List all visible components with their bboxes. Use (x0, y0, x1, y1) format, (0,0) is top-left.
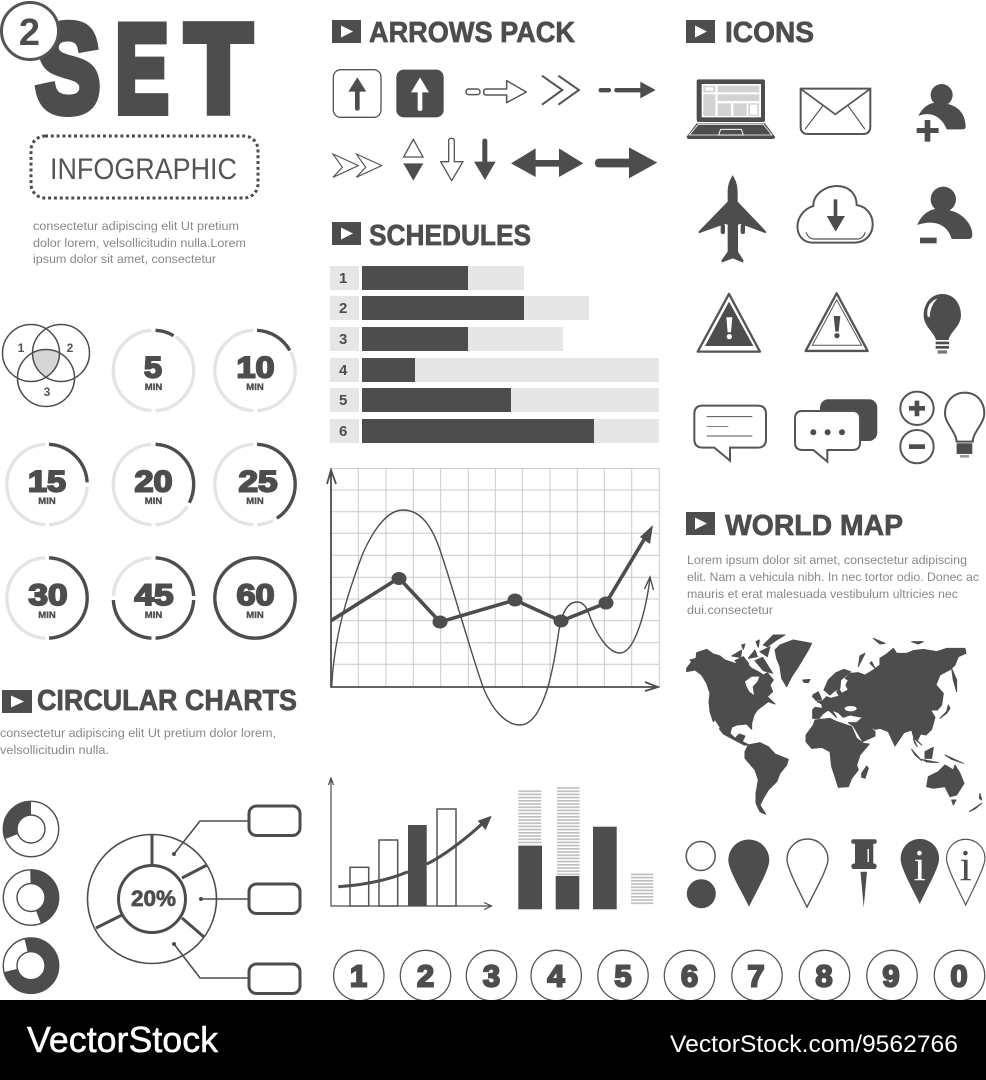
icon: filled dot (687, 879, 716, 908)
stacked bars with hatch (518, 787, 653, 909)
timer: 45 min (113, 558, 194, 638)
icon: light bulb filled (924, 294, 961, 354)
icon: filled pin (728, 839, 769, 907)
icon: user add (917, 84, 966, 142)
timer: 60 min: 60 (236, 579, 274, 612)
donut chart 2 (3, 870, 59, 925)
timer: 20 min: MIN (145, 496, 162, 507)
subtitle: infographic in dotted frame (31, 136, 258, 198)
text block: circular charts (0, 726, 276, 757)
badge: number 2 (2, 2, 58, 60)
timer: 60 min (215, 558, 295, 638)
icon: info pin outline: i (960, 841, 972, 890)
icons grid (687, 79, 984, 463)
timer: 15 min (7, 444, 87, 525)
bar chart with trend arrow (328, 778, 492, 910)
text block: intro (33, 219, 246, 266)
bar schedule chart (330, 266, 659, 443)
title: SET: E (116, 0, 168, 138)
arrows pack icons (333, 70, 657, 181)
subtitle: infographic in dotted frame: INFOGRAPHIC (50, 153, 237, 186)
bar schedule chart: 1 (339, 270, 347, 287)
timer: 15 min: MIN (38, 496, 56, 507)
timer: 20 min: 20 (134, 466, 172, 498)
heading: icons: ICONS (725, 17, 814, 49)
icon: plus and minus with bulb (900, 392, 984, 463)
line chart (327, 468, 660, 725)
bar schedule chart: 5 (339, 392, 347, 409)
timer: 25 min: MIN (246, 496, 264, 507)
icon: info pin filled (901, 839, 939, 904)
timer: 5 min: MIN (145, 382, 162, 393)
text block: intro: consectetur adipiscing elit Ut pretium (33, 219, 239, 233)
pie diagram with callouts (88, 806, 300, 994)
footer band (0, 1000, 986, 1080)
icon: envelope (801, 89, 870, 134)
number circles: 6 (681, 958, 698, 994)
timer: 5 min: 5 (144, 352, 162, 384)
footer band: VectorStock (27, 1019, 219, 1060)
timer: 25 min (215, 444, 295, 525)
timer: 30 min: 30 (28, 579, 68, 612)
bar schedule chart: 6 (339, 423, 347, 440)
title: SET: S (36, 0, 100, 138)
bar schedule chart: 3 (339, 331, 347, 348)
icon: info pin filled: i (914, 841, 926, 890)
icon: cloud download (797, 186, 873, 243)
number circles: 0 (950, 958, 968, 994)
heading: schedules: SCHEDULES (369, 220, 531, 252)
icon: warning filled (698, 294, 760, 352)
badge: number 2: 2 (19, 12, 40, 54)
number circles: 1 (350, 958, 367, 994)
icon: info pin outline (946, 839, 985, 905)
icon: warning outline (806, 293, 868, 351)
text block: intro: ipsum dolor sit amet, consectetur (33, 252, 216, 266)
text block: world map: dui.consectetur (687, 603, 773, 617)
number circles: 7 (747, 958, 765, 994)
timer: 60 min: MIN (246, 610, 264, 621)
timer: 45 min: 45 (134, 579, 174, 612)
timer: 10 min: MIN (246, 382, 264, 393)
timer: 5 min (113, 330, 194, 411)
text block: world map: mauris et erat malesuada vestibulum ultricies nec (687, 587, 958, 601)
bar schedule chart: 2 (339, 300, 347, 317)
number circles: 5 (614, 958, 632, 994)
timer: 45 min: MIN (145, 610, 162, 621)
number circles: 3 (483, 958, 500, 994)
text block: circular charts: velsollicitudin nulla. (0, 743, 109, 757)
venn diagram: 1 (18, 341, 25, 355)
timer: 20 min (113, 444, 194, 525)
timer: 10 min: 10 (236, 352, 274, 384)
number circles: 9 (882, 958, 900, 994)
number circles: 8 (815, 958, 833, 994)
title: SET: T (186, 0, 252, 138)
icon: speech bubble lines (694, 406, 766, 461)
footer band: VectorStock.com/9562766 (670, 1031, 958, 1058)
venn diagram: 3 (44, 385, 51, 399)
text block: circular charts: consectetur adipiscing elit Ut pretium dolor lorem, (0, 726, 276, 740)
heading: arrows pack: ARROWS PACK (369, 17, 575, 49)
icon: chat bubbles (795, 399, 877, 462)
world map (687, 635, 982, 814)
number circles: 4 (547, 958, 565, 994)
icon: push pin (851, 839, 877, 908)
text block: world map (687, 553, 979, 617)
timer: 30 min: MIN (38, 610, 56, 621)
icon: airplane (699, 175, 766, 263)
text block: world map: Lorem ipsum dolor sit amet, consectetur adipiscing (687, 553, 967, 567)
text block: intro: dolor lorem, velsollicitudin nulla.Lorem (33, 236, 246, 250)
number circles: 2 (417, 958, 434, 994)
venn diagram: 2 (67, 341, 74, 355)
venn diagram (2, 324, 90, 406)
donut chart 3 (3, 938, 59, 993)
bar schedule chart: 4 (339, 362, 348, 379)
donut chart 1 (3, 801, 59, 857)
timer: 25 min: 25 (238, 466, 278, 498)
timer: 30 min (7, 558, 87, 638)
icon: empty dot (686, 842, 715, 870)
heading: circular charts: CIRCULAR CHARTS (37, 685, 297, 717)
heading: world map: WORLD MAP (725, 510, 903, 542)
heading: icons (686, 17, 814, 49)
icon: user remove (917, 187, 972, 243)
pie diagram with callouts: 20% (131, 886, 176, 911)
map pins (686, 839, 985, 908)
timer: 15 min: 15 (28, 466, 66, 498)
text block: world map: elit. Nam a vehicula nibh. In nec tortor odio. Donec ac (687, 570, 979, 584)
icon: laptop (687, 79, 775, 139)
timer: 10 min (215, 330, 295, 411)
title: SET (36, 0, 252, 138)
number circles (334, 950, 985, 1001)
icon: outline pin (787, 839, 828, 907)
